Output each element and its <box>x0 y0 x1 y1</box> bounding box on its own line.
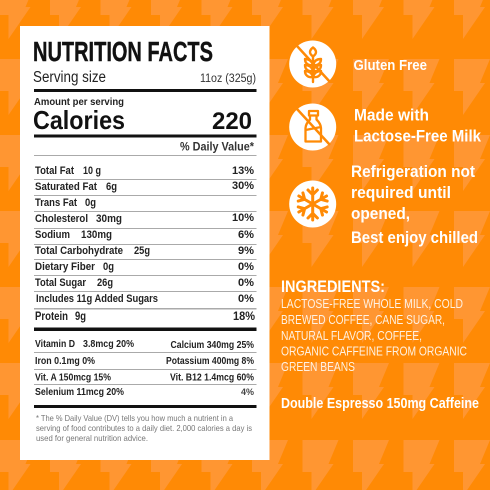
nutrient rows: Sodium <box>35 229 70 241</box>
ingredients list: NATURAL FLAVOR, COFFEE, <box>281 329 422 343</box>
vitamins and minerals: 3.8mcg 20% <box>83 338 135 350</box>
vitamins and minerals: Vit. B12 1.4mcg 60% <box>170 372 255 384</box>
vitamins and minerals: Iron 0.1mg 0% <box>35 355 96 367</box>
nutrient rows: 0% <box>238 293 254 305</box>
icon: gluten free wheat <box>289 40 336 88</box>
label: refrigeration note: Best enjoy chilled <box>351 229 478 247</box>
nutrient rows: 6% <box>238 229 254 241</box>
footnote: serving of food contributes to a daily diet. 2,000 calories a day is <box>36 423 252 433</box>
heading: nutrition facts: NUTRITION FACTS <box>33 36 213 67</box>
ingredients list: BREWED COFFEE, CANE SUGAR, <box>281 313 445 327</box>
nutrient rows: Trans Fat <box>35 197 77 209</box>
nutrient rows: 30mg <box>96 213 122 225</box>
nutrient rows: 26g <box>97 277 113 289</box>
vitamins and minerals: 4% <box>241 387 255 398</box>
label: made with lactose-free milk: Made with <box>354 107 429 125</box>
nutrient rows: 18% <box>233 311 255 323</box>
vitamins and minerals: Potassium 400mg 8% <box>166 355 255 367</box>
nutrient rows: 9g <box>75 311 86 323</box>
footnote: * The % Daily Value (DV) tells you how much a nutrient in a <box>36 413 233 423</box>
icon: snowflake <box>289 180 336 228</box>
nutrient rows: Protein <box>35 311 68 323</box>
label: gluten free: Gluten Free <box>354 58 427 74</box>
nutrient rows: 25g <box>134 245 150 257</box>
nutrient rows: 0g <box>103 261 114 273</box>
ingredients block <box>281 277 467 374</box>
label: made with lactose-free milk <box>354 107 482 146</box>
ingredients list <box>281 297 467 374</box>
nutrient rows: Includes 11g Added Sugars <box>36 293 158 305</box>
ingredients list: GREEN BEANS <box>281 360 355 374</box>
label: refrigeration note: Refrigeration not <box>351 163 475 181</box>
nutrient rows: Dietary Fiber <box>35 261 96 273</box>
label: refrigeration note <box>351 163 478 247</box>
nutrient rows: Cholesterol <box>35 213 88 225</box>
calories: 220 <box>212 108 252 135</box>
panel: nutrition facts label <box>20 26 270 460</box>
vitamins and minerals: Vitamin D <box>35 338 75 350</box>
nutrient rows: 0% <box>238 277 254 289</box>
amount per serving: Amount per serving <box>34 96 124 108</box>
nutrient rows: 130mg <box>81 229 112 241</box>
label: refrigeration note: required until <box>351 184 451 202</box>
nutrient rows: 30% <box>232 180 254 192</box>
vitamins and minerals: Selenium 11mcg 20% <box>35 386 125 398</box>
percent daily value header: % Daily Value* <box>180 142 254 154</box>
calories: Calories <box>33 105 125 135</box>
calories <box>33 105 252 135</box>
nutrient rows: 9% <box>238 245 254 257</box>
nutrient rows: Saturated Fat <box>35 181 97 193</box>
ingredients heading: INGREDIENTS: <box>281 277 385 296</box>
nutrient rows: Total Sugar <box>35 277 87 289</box>
nutrient rows <box>35 165 255 323</box>
nutrient rows: 0% <box>238 261 254 273</box>
nutrient rows: 10 g <box>83 165 101 177</box>
nutrient rows: 13% <box>232 165 254 177</box>
nutrient rows: Total Carbohydrate <box>35 245 123 257</box>
label: made with lactose-free milk: Lactose-Free Milk <box>354 128 482 146</box>
serving size: 11oz (325g) <box>200 73 256 85</box>
nutrient rows: 10% <box>232 212 254 224</box>
footnote <box>36 413 252 443</box>
vitamins and minerals: Calcium 340mg 25% <box>170 339 255 351</box>
vitamins and minerals: Vit. A 150mcg 15% <box>35 372 112 384</box>
footnote: used for general nutrition advice. <box>36 433 148 443</box>
nutrient rows: Total Fat <box>35 165 74 177</box>
serving size <box>33 69 256 86</box>
label: refrigeration note: opened, <box>351 205 410 223</box>
vitamins and minerals <box>35 338 255 398</box>
nutrient rows: 0g <box>85 197 96 209</box>
icon: lactose free milk bottle <box>289 104 336 150</box>
serving size: Serving size <box>33 69 106 86</box>
nutrient rows: 6g <box>106 181 117 193</box>
